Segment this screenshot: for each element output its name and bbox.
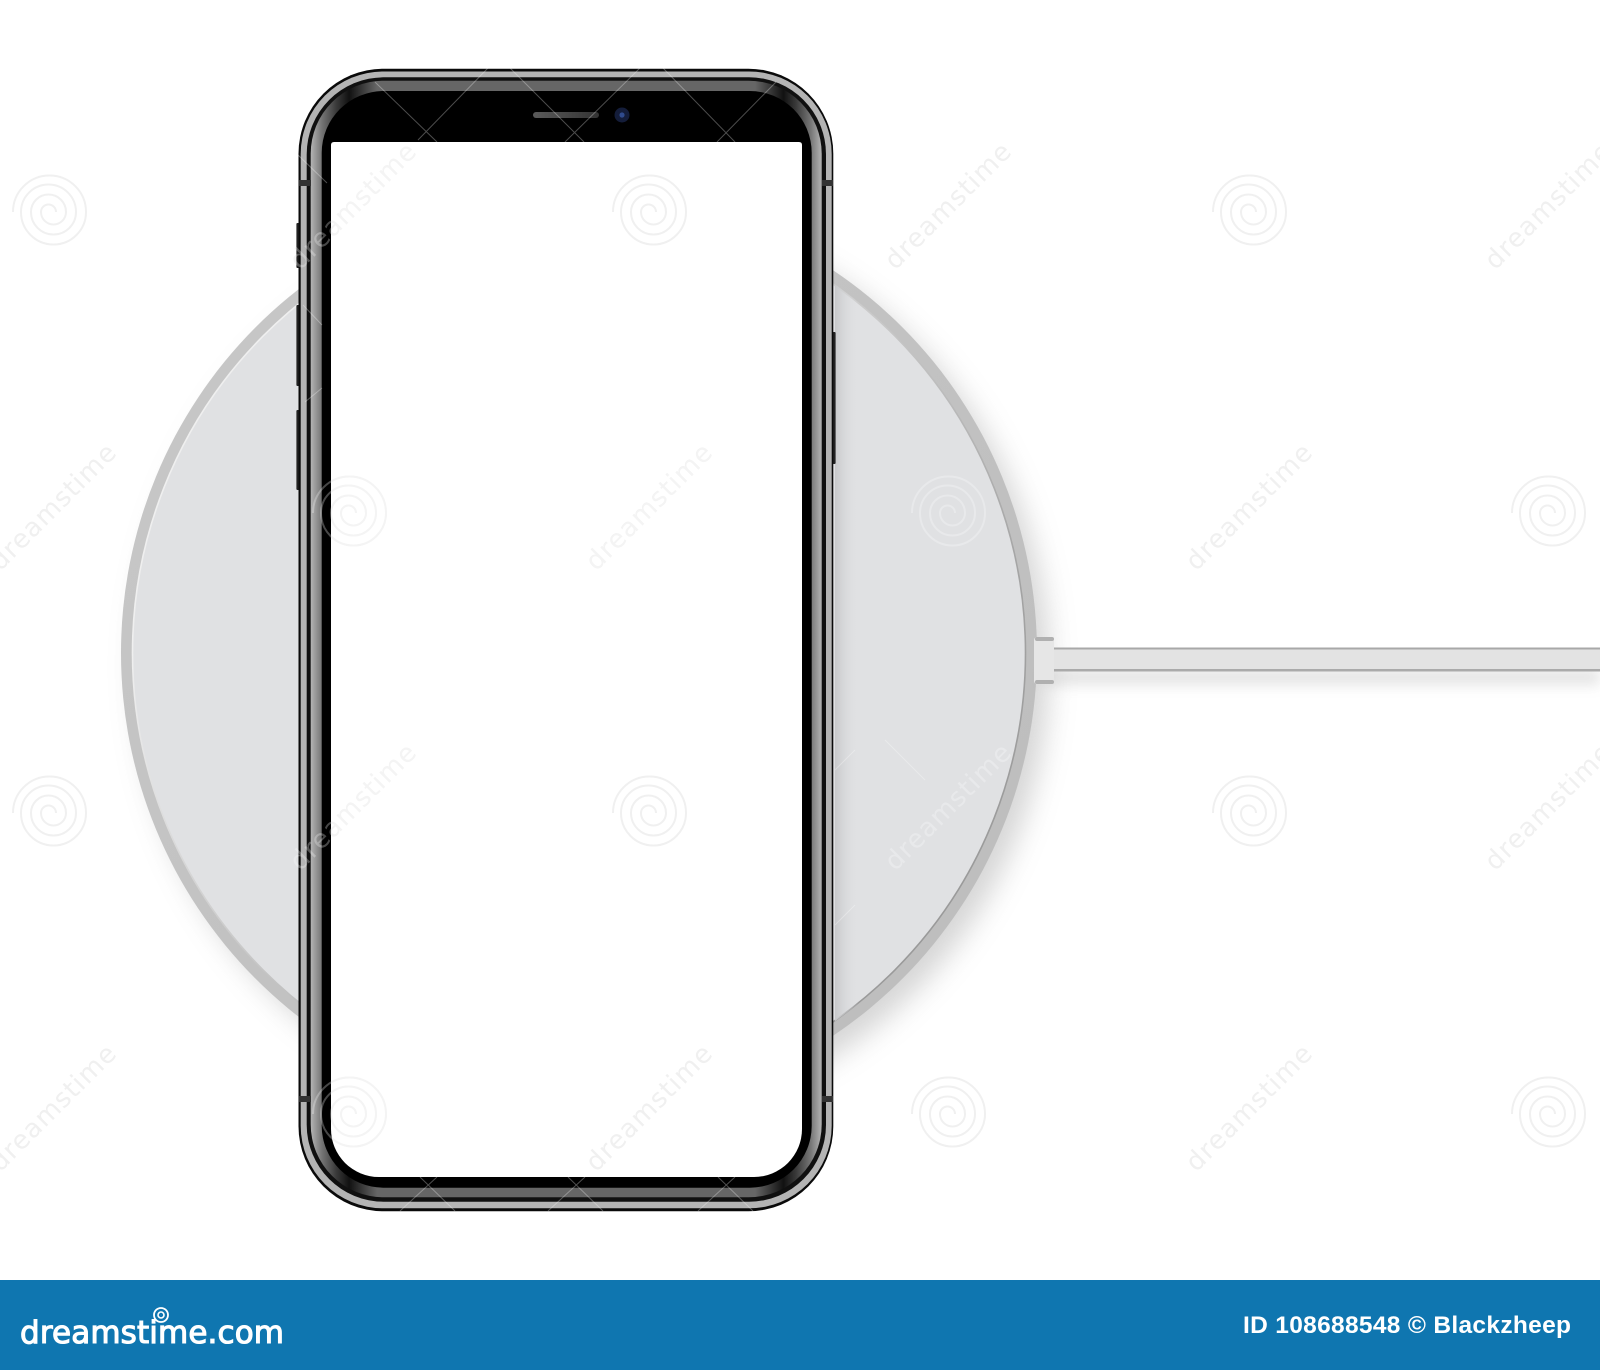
wireless charging pad xyxy=(121,264,1060,1069)
antenna bands xyxy=(299,180,833,1102)
watermark: spirals and wordmarks on white areas: dreamstime xyxy=(284,738,423,877)
smartphone xyxy=(296,69,836,1211)
watermark lines xyxy=(298,68,925,1211)
watermark: light overlay on pad and bezel: dreamstime xyxy=(580,438,719,577)
watermark: spirals and wordmarks on white areas: dreamstime xyxy=(879,738,1018,877)
watermark: spirals and wordmarks on white areas: dreamstime xyxy=(580,438,719,577)
screen xyxy=(331,142,802,1177)
camera xyxy=(614,108,630,122)
watermark: light overlay on pad and bezel xyxy=(284,137,1018,1146)
watermark: spirals and wordmarks on white areas: dreamstime xyxy=(1180,438,1319,577)
speaker xyxy=(533,112,599,118)
watermark: spirals and wordmarks on white areas: dreamstime xyxy=(580,1039,719,1178)
watermark: light overlay on pad and bezel: dreamstime xyxy=(879,738,1018,877)
footer logo wordmark: dreamstime.com xyxy=(20,1315,284,1351)
footer bar xyxy=(0,1280,1600,1370)
watermark: light overlay on pad and bezel: dreamstime xyxy=(284,137,423,276)
side buttons xyxy=(296,223,836,490)
watermark: spirals and wordmarks on white areas xyxy=(0,137,1600,1178)
charging cable xyxy=(1034,637,1600,684)
phone body bands xyxy=(298,69,833,1211)
watermark: spirals and wordmarks on white areas: dreamstime xyxy=(879,137,1018,276)
footer logo spiral xyxy=(154,1308,168,1322)
watermark: spirals and wordmarks on white areas: dreamstime xyxy=(1180,1039,1319,1178)
watermark: light overlay on pad and bezel: dreamstime xyxy=(284,738,423,877)
image id and credit: ID 108688548 © Blackzheep xyxy=(1243,1312,1571,1339)
watermark: spirals and wordmarks on white areas: dreamstime xyxy=(284,137,423,276)
